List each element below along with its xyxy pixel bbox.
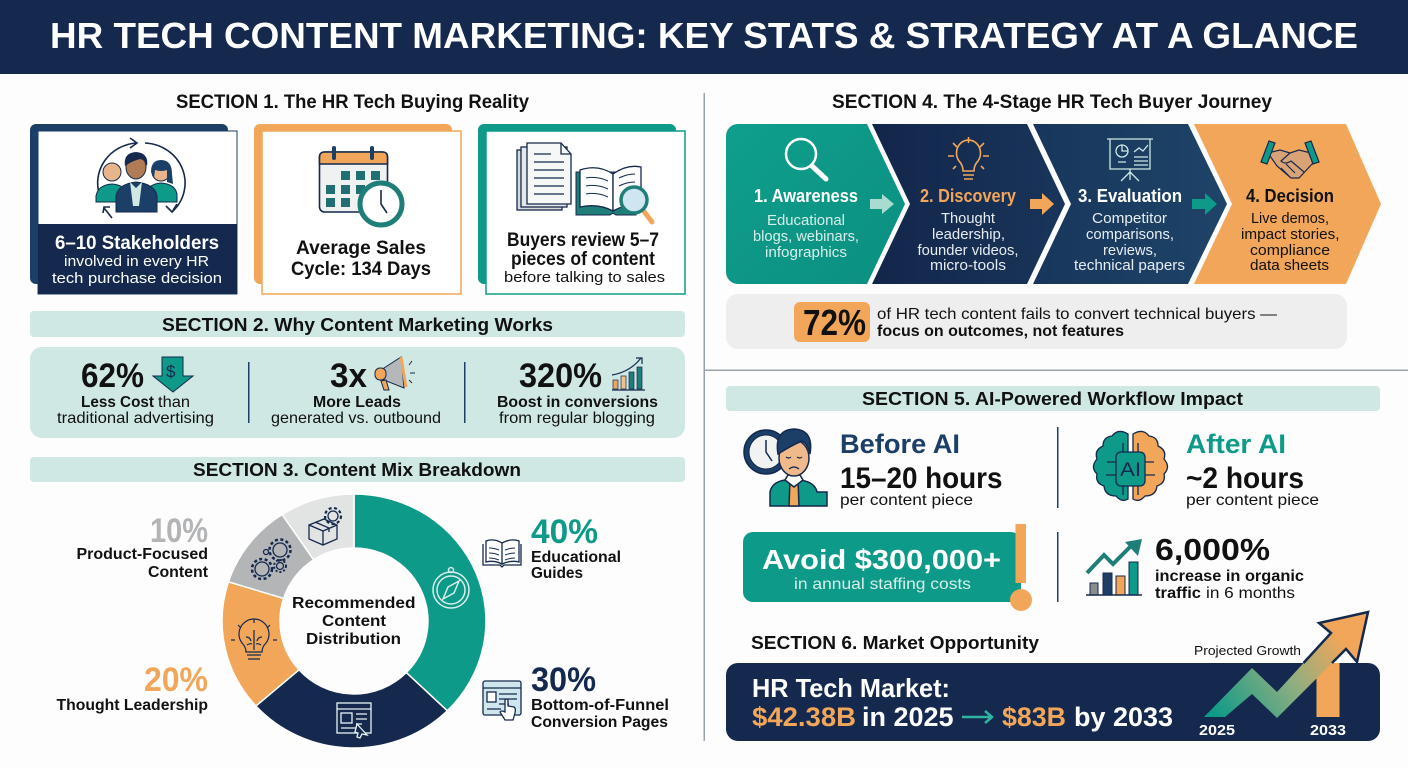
stage 2: discovery: leadership,	[932, 226, 1005, 243]
center label: Distribution	[306, 631, 401, 648]
stakeholders text: tech purchase decision	[52, 270, 222, 287]
label: 40% educational guides: 40%	[531, 513, 598, 551]
market text: by 2033	[1074, 702, 1173, 732]
icon: open book	[483, 540, 521, 567]
stage 2: discovery: 2. Discovery	[920, 186, 1016, 206]
stat: 3x more leads: More Leads	[313, 394, 401, 411]
market text	[752, 673, 1173, 732]
stage 1: awareness: infographics	[765, 244, 847, 261]
stat: 6,000% organic traffic: traffic	[1155, 585, 1201, 602]
stat: 6,000% organic traffic	[1155, 532, 1304, 602]
section 5 heading	[726, 386, 1380, 411]
icon: stakeholders group	[96, 138, 185, 218]
after AI text: ~2 hours	[1186, 462, 1304, 495]
segment: product-focused box	[282, 494, 354, 560]
stakeholders text	[52, 233, 222, 287]
section 2 heading: SECTION 2. Why Content Marketing Works	[162, 315, 553, 335]
after AI text: per content piece	[1186, 492, 1319, 509]
callout: avoid staffing costs	[743, 524, 1032, 611]
label: 10% product-focused: 10%	[150, 512, 208, 550]
stat: 320% boost in conversions: 320%	[519, 357, 602, 395]
icon: web page with cursor	[337, 703, 371, 738]
callout: 72% fail to convert: focus on outcomes, not features	[877, 323, 1124, 340]
center label	[292, 595, 416, 648]
market text: in 2025	[862, 702, 954, 732]
buyer journey chevrons	[726, 124, 1381, 284]
label: 20% thought leadership: 20%	[144, 661, 208, 699]
segment: educational guides 40%	[354, 494, 486, 711]
label: 30% bottom-of-funnel: Bottom-of-Funnel	[531, 697, 669, 714]
panel: why content marketing works	[30, 347, 685, 438]
stat: 62% less cost: Less Cost	[81, 394, 155, 411]
stat: 6,000% organic traffic: 6,000%	[1155, 532, 1270, 567]
section 6 heading: SECTION 6. Market Opportunity	[751, 633, 1039, 653]
stat: 320% boost in conversions: from regular blogging	[499, 410, 655, 427]
market text: HR Tech Market:	[752, 673, 950, 703]
market text: $83B	[1002, 702, 1066, 732]
sales cycle text: Average Sales	[296, 238, 426, 259]
label: 40% educational guides: Educational	[531, 549, 621, 566]
icon: megaphone	[375, 357, 415, 390]
stakeholders text: 6–10 Stakeholders	[55, 233, 219, 254]
after AI text: After AI	[1186, 429, 1286, 459]
content reviewed text: Buyers review 5–7	[507, 230, 659, 251]
callout: 72% fail to convert	[726, 294, 1347, 349]
icon: calendar and clock	[320, 146, 402, 225]
icon: rising bar chart	[612, 358, 645, 390]
icon: magnifying glass	[786, 139, 826, 179]
before AI text: 15–20 hours	[840, 462, 1002, 495]
title banner	[0, 0, 1408, 74]
icon: web page with hand	[483, 681, 521, 720]
section 4 heading: SECTION 4. The 4-Stage HR Tech Buyer Journey	[832, 92, 1272, 113]
label: 40% educational guides	[531, 513, 621, 582]
icon: presentation board	[1107, 139, 1153, 181]
callout: avoid staffing costs: in annual staffing costs	[794, 576, 971, 593]
arrow: awareness to discovery	[870, 194, 894, 214]
market text: $42.38B	[752, 702, 856, 732]
callout: avoid staffing costs: Avoid $300,000+	[762, 544, 1001, 575]
icon: down arrow with dollar	[153, 357, 193, 392]
chart: projected growth: 2025	[1199, 722, 1235, 739]
label: 30% bottom-of-funnel	[531, 661, 669, 731]
section 1 heading: SECTION 1. The HR Tech Buying Reality	[176, 92, 529, 113]
stage 2: discovery: Thought	[941, 210, 996, 227]
stage 2: discovery	[872, 124, 1065, 284]
stat: 3x more leads: generated vs. outbound	[271, 410, 441, 427]
stage 1: awareness	[726, 124, 905, 284]
before AI text: Before AI	[840, 429, 960, 459]
stat: 6,000% organic traffic: increase in organic	[1155, 568, 1304, 585]
icon: handshake	[1261, 141, 1319, 178]
before AI text	[840, 429, 1002, 509]
stage 2: discovery: founder videos,	[918, 242, 1018, 259]
chart: projected growth: 2033	[1310, 722, 1346, 739]
stage 3: evaluation: technical papers	[1074, 257, 1185, 274]
stage 1: awareness: blogs, webinars,	[753, 228, 859, 245]
section 3 heading	[30, 457, 685, 482]
segment: thought leadership 20%	[222, 582, 299, 706]
stage 3: evaluation: reviews,	[1103, 242, 1157, 259]
content reviewed text: pieces of content	[511, 249, 656, 270]
segment: product-focused gears	[228, 514, 314, 598]
icon: brain lightbulb	[231, 619, 277, 659]
label: 10% product-focused	[76, 512, 209, 581]
card: sales cycle	[254, 124, 461, 294]
stat: 62% less cost: than	[158, 394, 190, 411]
label: 20% thought leadership: Thought Leadership	[56, 697, 208, 714]
stage 1: awareness: Educational	[767, 212, 845, 229]
stage 3: evaluation: Competitor	[1092, 210, 1167, 227]
stage 3: evaluation: 3. Evaluation	[1078, 186, 1182, 206]
icon: AI brain: AI	[1120, 460, 1141, 481]
center label: Content	[322, 613, 387, 630]
stat: 320% boost in conversions	[497, 357, 658, 427]
after AI text	[1186, 429, 1319, 509]
section 5 heading: SECTION 5. AI-Powered Workflow Impact	[862, 389, 1243, 409]
donut chart: recommended content distribution	[222, 494, 486, 748]
stage 2: discovery: micro-tools	[930, 257, 1006, 274]
center label: Recommended	[292, 595, 416, 612]
icon: growth chart	[1086, 539, 1142, 595]
chart: projected growth: Projected Growth	[1194, 643, 1301, 658]
stage 4: decision: impact stories,	[1241, 226, 1340, 243]
stage 3: evaluation: comparisons,	[1086, 226, 1174, 243]
callout: 72% fail to convert: 72%	[803, 302, 866, 343]
sales cycle text	[291, 238, 431, 280]
stat: 320% boost in conversions: Boost in conversions	[497, 394, 658, 411]
label: 30% bottom-of-funnel: Conversion Pages	[531, 714, 668, 731]
stat: 62% less cost	[57, 357, 214, 427]
icon: gears	[252, 540, 290, 579]
stage 4: decision: Live demos,	[1251, 210, 1329, 227]
stage 1: awareness: 1. Awareness	[754, 186, 858, 206]
icon: documents and open book with magnifier	[517, 143, 652, 222]
icon: down arrow with dollar: $	[166, 362, 176, 381]
stakeholders text: involved in every HR	[64, 253, 209, 270]
segment: bottom-of-funnel 30%	[256, 670, 447, 748]
stage 4: decision: compliance	[1250, 242, 1330, 259]
sales cycle text: Cycle: 134 Days	[291, 259, 431, 280]
chart: projected growth	[1194, 612, 1368, 739]
section 3 heading: SECTION 3. Content Mix Breakdown	[193, 460, 521, 480]
stat: 62% less cost: traditional advertising	[57, 410, 214, 427]
stage 4: decision: 4. Decision	[1246, 186, 1334, 206]
icon: compass	[433, 568, 469, 608]
content reviewed text: before talking to sales	[504, 269, 665, 286]
panel: market opportunity	[726, 612, 1380, 741]
content reviewed text	[504, 230, 665, 286]
label: 10% product-focused: Product-Focused	[76, 546, 208, 563]
stat: 62% less cost: 62%	[81, 357, 144, 395]
label: 10% product-focused: Content	[148, 564, 209, 581]
icon: exclamation mark	[1010, 524, 1032, 611]
label: 40% educational guides: Guides	[531, 565, 583, 582]
stat: 3x more leads: 3x	[330, 357, 367, 395]
stage 4: decision: data sheets	[1250, 257, 1329, 274]
icon: tired worker with clock	[744, 429, 827, 506]
section 2 heading	[30, 311, 685, 337]
label: 20% thought leadership	[56, 661, 208, 714]
icon: box with gear	[309, 508, 341, 545]
title banner: HR TECH CONTENT MARKETING: KEY STATS & STRATEGY AT A GLANCE	[50, 15, 1358, 56]
callout: 72% fail to convert: of HR tech content fails to convert technical buyers —	[877, 306, 1277, 323]
stage 3: evaluation	[1033, 124, 1227, 284]
icon: lightbulb	[948, 137, 989, 179]
before AI text: per content piece	[840, 492, 973, 509]
stat: 3x more leads	[271, 357, 441, 427]
card: stakeholders	[30, 124, 237, 294]
card: content reviewed	[478, 124, 685, 294]
stage 4: decision	[1194, 124, 1381, 284]
stat: 6,000% organic traffic: in 6 months	[1206, 585, 1295, 602]
icon: AI brain	[1094, 431, 1168, 500]
arrow: evaluation to decision	[1192, 193, 1217, 215]
label: 30% bottom-of-funnel: 30%	[531, 661, 596, 699]
arrow: discovery to evaluation	[1030, 193, 1054, 215]
